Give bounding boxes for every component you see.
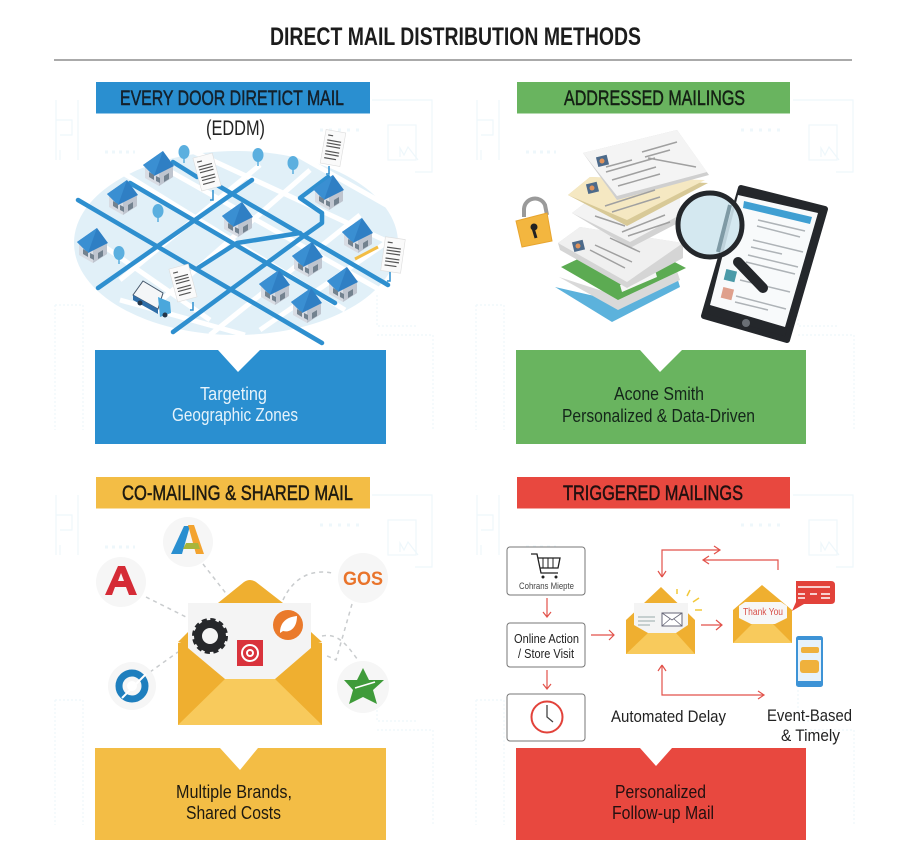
logo: red A bbox=[96, 557, 146, 607]
panel: triggered mailings bbox=[507, 477, 852, 840]
callout: personalized and data-driven bbox=[516, 350, 806, 444]
callout: personalized follow-up mail: Personalized bbox=[615, 782, 706, 802]
callout: personalized follow-up mail: Follow-up Mail bbox=[612, 803, 714, 823]
heading: addressed mailings bbox=[517, 82, 790, 114]
illustration: neighbourhood map bbox=[74, 130, 405, 343]
callout: personalized and data-driven: Acone Smith bbox=[614, 384, 704, 404]
heading: EDDM: (EDDM) bbox=[206, 117, 265, 140]
flow box: cart: Cohrans Miepte bbox=[519, 581, 574, 592]
label: event-based and timely: & Timely bbox=[781, 726, 840, 745]
panel: every door direct mail bbox=[74, 82, 405, 444]
callout: multiple brands: Multiple Brands, bbox=[176, 782, 292, 802]
heading: addressed mailings: ADDRESSED MAILINGS bbox=[564, 87, 745, 110]
icon: gear bbox=[194, 620, 226, 652]
callout: personalized and data-driven: Personalized & Data-Driven bbox=[562, 406, 755, 426]
label: automated delay: Automated Delay bbox=[611, 707, 726, 726]
title: DIRECT MAIL DISTRIBUTION METHODS bbox=[270, 23, 641, 51]
panel: co-mailing and shared mail bbox=[95, 477, 389, 840]
callout: multiple brands bbox=[95, 748, 386, 840]
logo: GOS bbox=[338, 553, 388, 603]
heading: triggered mailings bbox=[517, 477, 790, 508]
heading: EDDM: EVERY DOOR DIRETICT MAIL bbox=[120, 87, 344, 110]
callout: multiple brands: Shared Costs bbox=[186, 803, 281, 823]
callout: targeting geographic zones: Geographic Zones bbox=[172, 405, 298, 425]
logo: green star bbox=[337, 661, 389, 713]
panel: addressed mailings bbox=[516, 82, 825, 444]
label: event-based and timely bbox=[767, 706, 852, 745]
callout: targeting geographic zones: Targeting bbox=[200, 384, 267, 404]
background decorative patterns bbox=[55, 100, 854, 825]
logo: colour A bbox=[163, 517, 213, 567]
illustration: envelope bbox=[178, 580, 322, 725]
label: event-based and timely: Event-Based bbox=[767, 706, 852, 725]
icon: tablet bbox=[704, 188, 825, 340]
flow box: online action: / Store Visit bbox=[518, 646, 574, 661]
icon: red target bbox=[237, 640, 263, 666]
flow box: clock bbox=[507, 694, 585, 741]
icon: phone bbox=[796, 636, 823, 687]
callout: personalized follow-up mail bbox=[516, 748, 806, 840]
icon: thank you envelope bbox=[733, 585, 792, 643]
icon: orange leaf bbox=[273, 610, 303, 640]
icon: magnifying glass bbox=[678, 193, 763, 288]
heading: EDDM bbox=[96, 82, 370, 140]
dashed connectors bbox=[146, 564, 358, 672]
illustration: stack of mail bbox=[555, 130, 709, 322]
icon: speech bubble bbox=[792, 581, 835, 611]
arrows bbox=[543, 546, 778, 699]
icon: thank you envelope: Thank You bbox=[743, 607, 783, 618]
heading: co-mailing: CO-MAILING & SHARED MAIL bbox=[122, 482, 353, 505]
flow box: online action bbox=[507, 623, 585, 667]
icon: open envelope with sparkles bbox=[626, 587, 702, 654]
icon: delivery truck bbox=[133, 281, 171, 318]
heading: triggered mailings: TRIGGERED MAILINGS bbox=[563, 482, 743, 505]
flow box: cart bbox=[507, 547, 585, 595]
logo: blue ring bbox=[108, 662, 156, 710]
callout: targeting geographic zones bbox=[95, 350, 386, 444]
logo: GOS: GOS bbox=[343, 569, 383, 590]
flow box: online action: Online Action bbox=[514, 631, 579, 646]
icon: padlock bbox=[516, 199, 552, 247]
heading: co-mailing bbox=[96, 477, 370, 508]
